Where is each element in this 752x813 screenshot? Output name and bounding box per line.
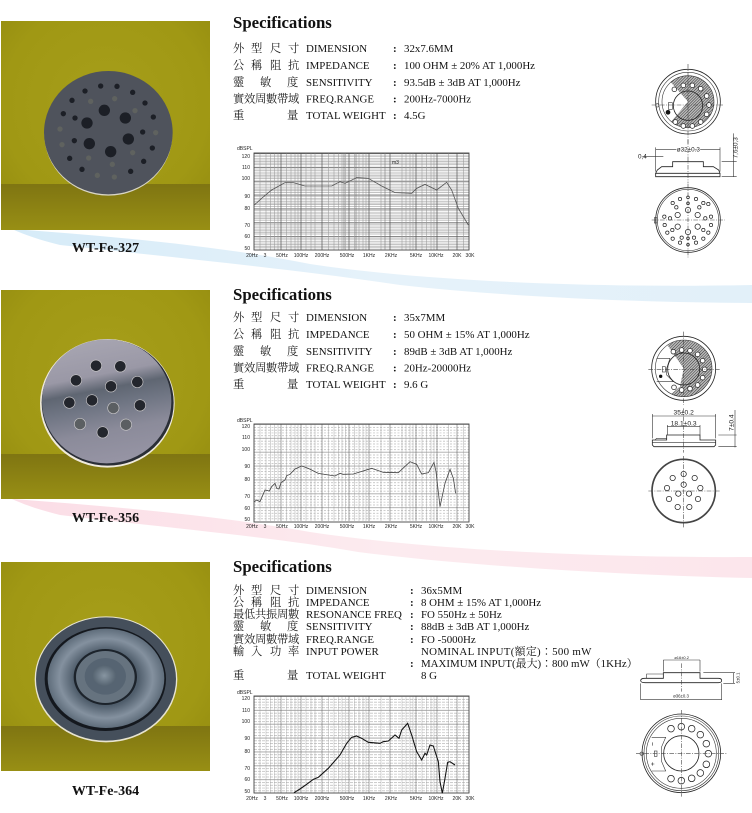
frequency response chart: m3: [392, 160, 399, 166]
specification table: :: [393, 329, 397, 341]
frequency response chart: 200Hz: [315, 524, 330, 530]
frequency response chart: 100Hz: [294, 253, 309, 259]
specification table: FO 550Hz ± 50Hz: [421, 609, 502, 621]
heading: specifications: Specifications: [233, 557, 332, 576]
frequency response chart: 70: [244, 223, 250, 229]
specification table: IMPEDANCE: [306, 60, 370, 72]
side view: 18.1±0.3: [671, 421, 697, 428]
frequency response chart: 1KHz: [363, 253, 376, 259]
specification table: SENSITIVITY: [306, 346, 373, 358]
frequency response chart: 20Hz: [246, 253, 258, 259]
specification table: DIMENSION: [306, 585, 367, 597]
background swoosh: pink: [12, 499, 752, 578]
heading: specifications: Specifications: [233, 13, 332, 32]
frequency response chart: 100Hz: [294, 796, 309, 802]
specification table: :: [393, 346, 397, 358]
frequency response chart: 70: [244, 766, 250, 772]
specification table: 公稱阻抗: [233, 58, 299, 72]
side view: ø32±0.3: [677, 147, 700, 154]
frequency response chart: 20K: [453, 524, 462, 530]
specification table: [233, 310, 530, 391]
specification table: DIMENSION: [306, 312, 367, 324]
frequency response chart: dBSPL: [237, 146, 253, 152]
specification table: 靈敏度: [233, 75, 298, 89]
specification table: 36x5MM: [421, 585, 462, 597]
model label: WT-Fe-327: [72, 241, 139, 256]
frequency response chart: 20Hz: [246, 796, 258, 802]
specification table: 32x7.6MM: [404, 43, 454, 55]
frequency response chart: 110: [242, 165, 250, 171]
specification table: 外型尺寸: [233, 41, 299, 55]
specification table: 實效周數帶域: [233, 92, 299, 106]
section: WT-Fe-327: [1, 13, 739, 259]
specification table: :: [393, 77, 397, 89]
frequency response chart: 70: [244, 494, 250, 500]
specification table: NOMINAL INPUT(額定)：500 mW: [421, 645, 592, 658]
frequency response chart: 500Hz: [340, 524, 355, 530]
frequency response chart: 90: [244, 736, 250, 742]
frequency response chart: 30K: [466, 796, 475, 802]
frequency response chart: 60: [244, 506, 250, 512]
side view: ø36±0.3: [673, 693, 690, 698]
frequency response chart: 60: [244, 777, 250, 783]
specification table: :: [410, 621, 414, 633]
frequency response chart: 90: [244, 464, 250, 470]
side view: ø16±0.2: [674, 655, 690, 660]
frequency response chart: 100: [242, 719, 250, 725]
specification table: 93.5dB ± 3dB AT 1,000Hz: [404, 77, 521, 89]
specification table: 最低共振周數: [233, 607, 299, 621]
specification table: 實效周數帶域: [233, 632, 299, 646]
specification table: 20Hz-20000Hz: [404, 362, 471, 374]
frequency response chart: 80: [244, 206, 250, 212]
specification table: 靈敏度: [233, 619, 298, 633]
frequency response chart: 50Hz: [276, 796, 288, 802]
top view: [647, 332, 720, 405]
frequency response chart: 50Hz: [276, 253, 288, 259]
frequency response chart: 2KHz: [385, 253, 398, 259]
specification table: :: [410, 585, 414, 597]
side view: 5±0.1: [735, 672, 740, 683]
frequency response chart: 10KHz: [428, 796, 444, 802]
side view: 35±0.2: [674, 409, 694, 416]
specification table: 4.5G: [404, 110, 426, 122]
specification table: FREQ.RANGE: [306, 94, 374, 106]
specification table: 88dB ± 3dB AT 1,000Hz: [421, 621, 530, 633]
side view: [652, 408, 737, 453]
background swoosh: blue: [12, 229, 752, 303]
specification table: 9.6 G: [404, 379, 428, 391]
specification table: 200Hz-7000Hz: [404, 94, 471, 106]
specification table: 重量: [233, 377, 298, 391]
specification table: 8 OHM ± 15% AT 1,000Hz: [421, 597, 541, 609]
specification table: SENSITIVITY: [306, 621, 373, 633]
side view: 7±0.4: [728, 414, 735, 431]
specification table: INPUT POWER: [306, 646, 379, 658]
side view: [641, 655, 740, 700]
specification table: 外型尺寸: [233, 310, 299, 324]
specification table: MAXIMUM INPUT(最大)：800 mW（1KHz）: [421, 656, 638, 670]
specification table: 公稱阻抗: [233, 327, 299, 341]
frequency response chart: 80: [244, 477, 250, 483]
frequency response chart: 80: [244, 749, 250, 755]
product photo: WT-Fe-364: [1, 562, 210, 771]
product photo: WT-Fe-356: [1, 290, 210, 499]
specification table: FO -5000Hz: [421, 634, 476, 646]
specification table: TOTAL WEIGHT: [306, 379, 386, 391]
frequency response chart: 10KHz: [428, 524, 444, 530]
heading: specifications: Specifications: [233, 285, 332, 304]
frequency response chart: 200Hz: [315, 796, 330, 802]
technical drawing: WT-Fe-327: [638, 64, 739, 257]
specification table: TOTAL WEIGHT: [306, 670, 386, 682]
side view: 7,6±0,3: [732, 137, 739, 158]
frequency response chart: 10KHz: [428, 253, 444, 259]
specification table: TOTAL WEIGHT: [306, 110, 386, 122]
frequency response chart: 3: [264, 253, 267, 259]
specification table: :: [393, 312, 397, 324]
frequency response chart: dBSPL: [237, 690, 253, 696]
specification table: SENSITIVITY: [306, 77, 373, 89]
specification table: :: [393, 60, 397, 72]
frequency response chart: 2KHz: [385, 796, 398, 802]
specification table: 8 G: [421, 670, 437, 682]
frequency response chart: [237, 146, 475, 259]
frequency response chart: 1KHz: [363, 796, 376, 802]
frequency response chart: 120: [242, 424, 250, 430]
frequency response chart: [237, 690, 475, 802]
frequency response chart: 5KHz: [410, 796, 423, 802]
specification table: 89dB ± 3dB AT 1,000Hz: [404, 346, 513, 358]
specification table: FREQ.RANGE: [306, 362, 374, 374]
specification table: 重量: [233, 668, 298, 682]
frequency response chart: 120: [242, 154, 250, 160]
frequency response chart: 50Hz: [276, 524, 288, 530]
frequency response chart: 90: [244, 194, 250, 200]
frequency response chart: 30K: [466, 253, 475, 259]
specification table: :: [410, 658, 414, 670]
frequency response chart: 3: [264, 524, 267, 530]
specification table: 35x7MM: [404, 312, 445, 324]
frequency response chart: 110: [242, 435, 250, 441]
section: WT-Fe-356: [1, 285, 737, 530]
frequency response chart: 120: [242, 696, 250, 702]
specification table: :: [410, 609, 414, 621]
specification table: [233, 41, 535, 122]
frequency response chart: 100: [242, 447, 250, 453]
frequency response chart: 500Hz: [340, 796, 355, 802]
side view: [638, 133, 739, 183]
product photo: WT-Fe-327: [1, 21, 210, 230]
specification table: FREQ.RANGE: [306, 634, 374, 646]
specification table: RESONANCE FREQ: [306, 609, 402, 621]
frequency response chart: dBSPL: [237, 418, 253, 424]
specification table: IMPEDANCE: [306, 329, 370, 341]
frequency response chart: 5KHz: [410, 524, 423, 530]
model label: WT-Fe-364: [72, 784, 139, 799]
specification table: IMPEDANCE: [306, 597, 370, 609]
specification table: 重量: [233, 108, 298, 122]
bottom view: [648, 456, 720, 527]
frequency response chart: 110: [242, 708, 250, 714]
frequency response chart: 5KHz: [410, 253, 423, 259]
frequency response chart: 2KHz: [385, 524, 398, 530]
model label: WT-Fe-356: [72, 511, 139, 526]
specification table: 50 OHM ± 15% AT 1,000Hz: [404, 329, 530, 341]
specification table: :: [393, 94, 397, 106]
frequency response chart: 50: [244, 517, 250, 523]
frequency response chart: 50: [244, 246, 250, 252]
technical drawing: WT-Fe-364: [636, 655, 740, 797]
frequency response chart: 50: [244, 789, 250, 795]
section: WT-Fe-364: [1, 557, 740, 802]
specification table: :: [393, 110, 397, 122]
frequency response chart: 3: [264, 796, 267, 802]
specification table: 公稱阻抗: [233, 595, 299, 609]
frequency response chart: 200Hz: [315, 253, 330, 259]
specification table: 靈敏度: [233, 344, 298, 358]
frequency response chart: [237, 418, 475, 530]
specification table: [233, 583, 638, 682]
technical drawing: WT-Fe-356: [647, 332, 737, 527]
frequency response chart: 1KHz: [363, 524, 376, 530]
frequency response chart: 100Hz: [294, 524, 309, 530]
top view: [650, 64, 723, 145]
specification table: :: [410, 634, 414, 646]
specification table: :: [393, 362, 397, 374]
frequency response chart: 20K: [453, 253, 462, 259]
specification table: 實效周數帶域: [233, 360, 299, 374]
specification table: :: [410, 597, 414, 609]
frequency response chart: 500Hz: [340, 253, 355, 259]
specification table: :: [393, 43, 397, 55]
frequency response chart: 100: [242, 176, 250, 182]
frequency response chart: 60: [244, 234, 250, 240]
specification table: 輸入功率: [233, 644, 299, 658]
frequency response chart: 20K: [453, 796, 462, 802]
specification table: 外型尺寸: [233, 583, 299, 597]
side view: 0,4: [638, 154, 647, 161]
frequency response chart: 20Hz: [246, 524, 258, 530]
frequency response chart: 30K: [466, 524, 475, 530]
specification table: 100 OHM ± 20% AT 1,000Hz: [404, 60, 535, 72]
bottom view: [652, 184, 725, 257]
specification table: DIMENSION: [306, 43, 367, 55]
specification table: :: [393, 379, 397, 391]
bottom view: [636, 710, 727, 797]
